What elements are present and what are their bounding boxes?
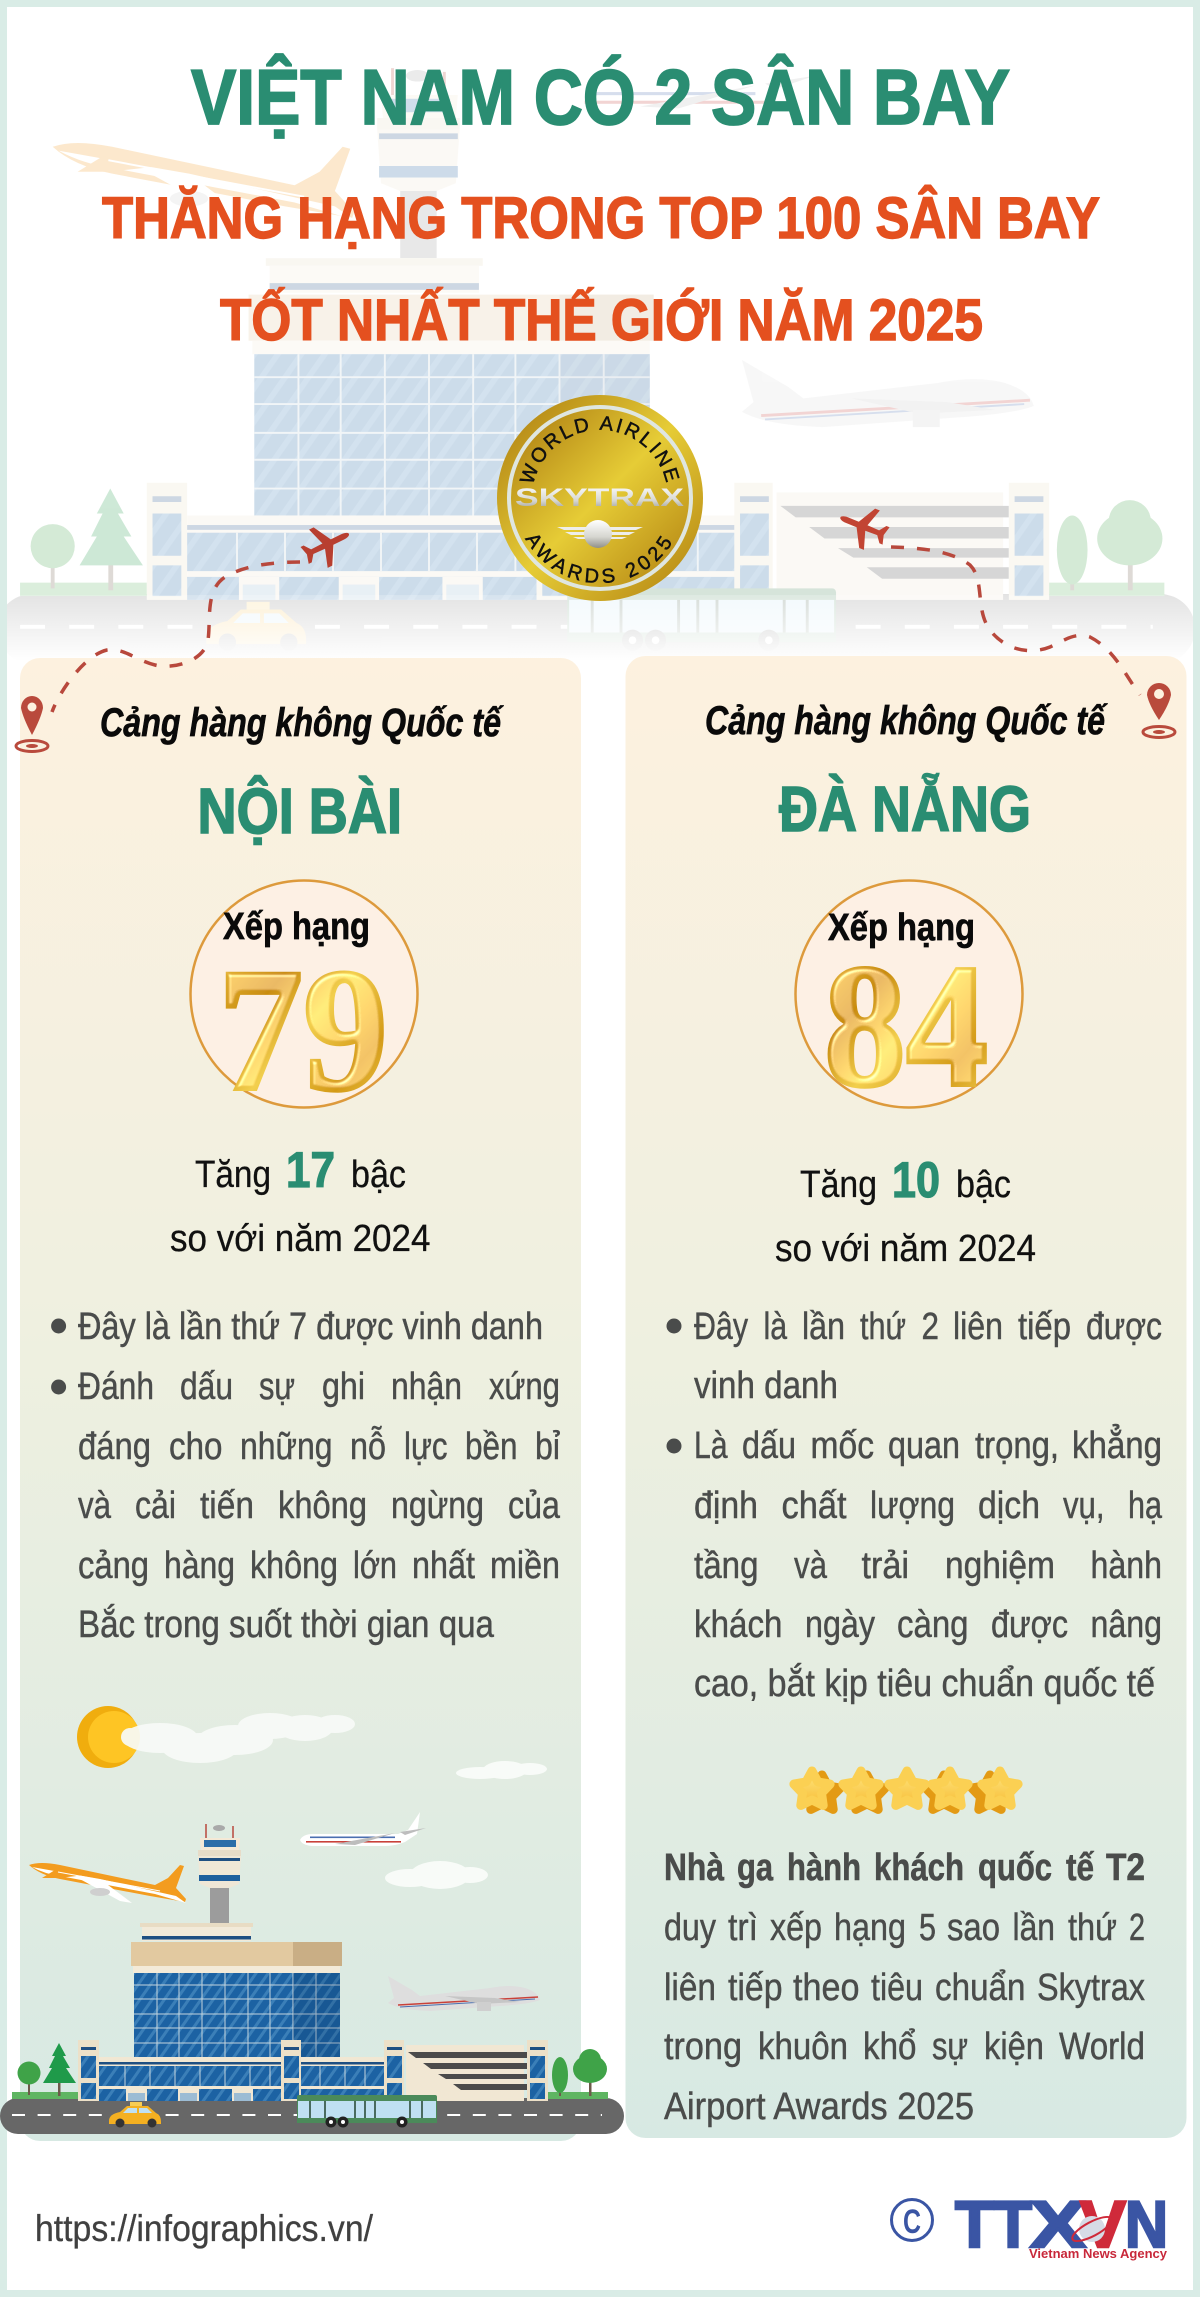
route: dashed flight path left [52,562,300,712]
logo: TTXVN: T [994,2187,1032,2261]
illustration: airport terminal [0,1812,624,2134]
bullet list: những [240,1426,332,1468]
rank change: so với năm 2024 [170,1218,430,1260]
rank number: 84 [824,929,988,1124]
bullet list [666,1306,1163,1705]
rank label: Xếp hạng [828,907,975,949]
bullet list: lực [404,1426,448,1468]
T2 paragraph: khách [874,1847,964,1889]
rank change: bậc [351,1154,406,1196]
bullet list: là [764,1306,788,1348]
logo: TTXVN: V [1080,2187,1126,2261]
T2 paragraph: sao [947,1907,1000,1949]
icon: copyright: C [903,2203,921,2241]
logo: TTXVN [955,2187,1168,2261]
bullet list: lớn [353,1545,397,1587]
panel: Đà Nẵng background [626,656,1186,2138]
bullet list: Bắc trong suốt thời gian qua [78,1603,495,1646]
icon: red plane left [295,515,358,575]
rank label: Xếp hạng [223,906,370,948]
bullet list: hành [1090,1545,1162,1587]
bullet list: bỉ [535,1426,560,1468]
bullet list: vụ, [1063,1485,1104,1527]
icon: location pin left [16,696,48,752]
bullet list: miền [490,1545,560,1587]
bullet list: không [278,1485,367,1527]
bullet list: 2 [922,1306,939,1348]
icon: cloud small [456,1761,547,1779]
footer url: https://infographics.vn/ [35,2208,374,2249]
T2 paragraph: quốc [978,1847,1052,1889]
bullet list: nhận [391,1366,462,1408]
T2 paragraph: duy [664,1907,716,1949]
bullet list: quan [888,1425,960,1467]
T2 paragraph: ga [737,1847,774,1889]
bullet list: Là [694,1425,728,1467]
panel content: Nội Bài [51,701,561,1646]
bullet list: cải [135,1485,176,1527]
bullet list: của [508,1485,561,1527]
T2 paragraph: tiếp [728,1967,782,2009]
T2 paragraph: liên [664,1967,716,2009]
T2 paragraph: Airport Awards 2025 [664,2086,974,2128]
title [102,53,1100,353]
bullet list: Đây là lần thứ 7 được vinh danh [78,1306,543,1348]
T2 paragraph: hạng [834,1907,906,1949]
bullet list [51,1306,561,1646]
icon: Skytrax award badge [497,395,703,601]
T2 paragraph: sự [932,2026,968,2068]
bullet list: tiến [200,1485,254,1527]
icon: sun [77,1706,140,1768]
T2 paragraph: khuôn [758,2026,848,2068]
bullet list: mốc [810,1425,874,1467]
header faded airport illustration [0,45,1200,670]
T2 paragraph: xếp [770,1907,822,1949]
panel content: Đà Nẵng [664,699,1163,2128]
icon: five stars [794,1771,1018,1809]
logo tagline: Vietnam News Agency [1029,2246,1168,2261]
bullet list: càng [897,1604,968,1646]
icon: cloud medium [385,1861,488,1889]
bullet list: liên [953,1306,1003,1348]
bullet list: lượng [870,1485,955,1527]
rank change [775,1152,1036,1270]
T2 paragraph: tế [1066,1847,1095,1889]
T2 paragraph: thứ [1068,1907,1117,1949]
bullet list: dịch [978,1485,1040,1527]
bullet list: cảng [78,1545,149,1587]
bullet list: trải [862,1545,909,1587]
bullet list: nâng [1090,1604,1162,1646]
T2 paragraph: World [1059,2026,1145,2068]
bullet list: lần [802,1306,845,1348]
rank change: so với năm 2024 [775,1228,1036,1270]
bullet list: đáng [78,1426,151,1468]
bullet list: hàng [164,1545,235,1587]
bullet list: bền [465,1426,518,1468]
rank change: Tăng [800,1164,877,1206]
T2 paragraph: tiêu [871,1967,923,2009]
bullet list: dấu [742,1425,796,1467]
bullet list: khách [694,1604,782,1646]
bullet list: ngày [805,1604,875,1646]
icon: red plane right [832,498,894,556]
airport label: Cảng hàng không Quốc tế [705,699,1108,743]
rank change: 17 [286,1142,335,1198]
T2 paragraph: trong [664,2026,742,2068]
bullet list: và [78,1485,112,1527]
bullet list: chất [782,1485,847,1527]
rank change: 10 [892,1152,940,1208]
bullet list: cao, bắt kịp tiêu chuẩn quốc tế [694,1662,1155,1705]
T2 paragraph: chuẩn [935,1967,1026,2009]
T2 paragraph: 5 [919,1907,936,1949]
T2 paragraph: theo [793,1967,860,2009]
bullet list: dấu [180,1366,233,1408]
icon: location pin right [1143,683,1175,738]
bullet list: vinh danh [694,1365,838,1407]
airport label: Cảng hàng không Quốc tế [100,701,504,745]
bullet list: không [250,1545,338,1587]
T2 paragraph: 2 [1129,1907,1145,1949]
icon: cloud large [121,1713,355,1763]
T2 paragraph: hành [787,1847,861,1889]
rank change: bậc [956,1164,1011,1206]
panel: Nội Bài background [20,658,581,2141]
bullet list: Đánh [78,1366,154,1408]
airport name: ĐÀ NẴNG [779,773,1031,845]
bullet list: khẳng [1072,1423,1162,1467]
badge wing emblem [557,520,643,548]
bullet list: tầng [694,1545,758,1587]
badge top text: WORLD AIRLINE [519,416,680,482]
bullet list: hạ [1128,1485,1163,1527]
rank change: Tăng [195,1154,271,1196]
badge bottom text: AWARDS 2025 [524,535,671,583]
title line 1: VIỆT NAM CÓ 2 SÂN BAY [191,53,1010,141]
logo: TTXVN: X [1030,2187,1086,2261]
T2 paragraph: kiện [984,2026,1044,2068]
route: dashed flight path right [891,547,1140,695]
bullet list: tiếp [1018,1306,1071,1348]
bullet list: ghi [322,1366,365,1408]
icon: copyright [892,2200,932,2241]
rank number: 79 [218,933,388,1128]
airport name: NỘI BÀI [198,774,402,847]
bullet list: định [694,1485,758,1527]
T2 paragraph: Skytrax [1037,1967,1145,2009]
title line 3: TỐT NHẤT THẾ GIỚI NĂM 2025 [220,288,983,353]
bullet list: ngừng [391,1485,484,1527]
bullet list: cho [169,1426,222,1468]
T2 paragraph [664,1847,1145,2128]
bullet list: được [1086,1306,1162,1348]
bullet list: xứng [489,1366,560,1408]
bullet list: nỗ [350,1425,386,1468]
bullet list: được [991,1604,1068,1646]
bullet list: sự [259,1366,295,1408]
bullet list: trọng, [975,1425,1059,1467]
rank circle [190,880,418,1108]
logo: TTXVN: T [955,2187,994,2261]
T2 paragraph: trì [728,1907,758,1949]
badge Skytrax wordmark: SKYTRAX [515,484,684,512]
rank change [170,1142,430,1260]
bullet list: nhất [412,1545,475,1587]
rank circle [796,880,1022,1108]
bullet list: thứ [860,1306,906,1348]
T2 paragraph: Nhà [664,1847,725,1889]
logo: TTXVN: N [1125,2187,1168,2261]
T2 paragraph: khổ [863,2026,916,2068]
bullet list: và [794,1545,828,1587]
T2 paragraph: T2 [1106,1847,1145,1889]
bullet list: Đây [694,1306,748,1348]
T2 paragraph: lần [1012,1907,1055,1949]
bullet list: nghiệm [945,1545,1055,1587]
